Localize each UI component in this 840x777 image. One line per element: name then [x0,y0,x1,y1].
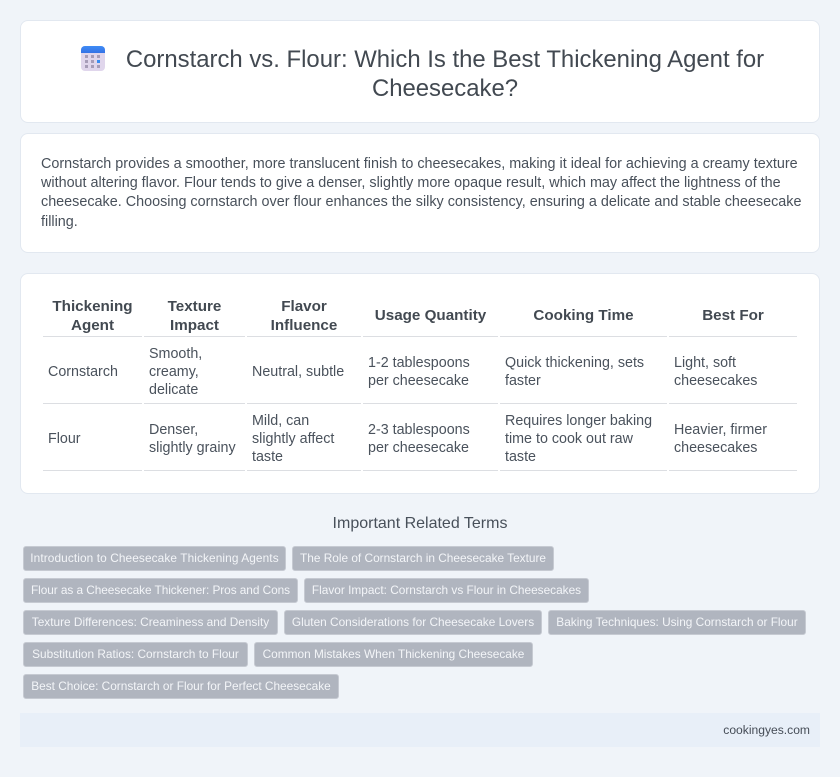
table header: Impact [170,317,219,334]
row: flour: slightly grainy [149,440,236,456]
intro text [41,156,801,230]
table header [52,298,764,334]
row: cornstarch [48,346,757,398]
related terms tags: Flour as a Cheesecake Thickener: Pros and Cons [31,583,290,597]
table header: Flavor [281,298,327,315]
row: cornstarch: Quick thickening, sets [505,355,644,371]
title [126,46,764,102]
related terms tags: Texture Differences: Creaminess and Density [32,615,269,629]
table header: Texture [168,298,221,315]
row: flour: Requires longer baking [505,413,652,429]
row: flour: Heavier, firmer [674,422,767,438]
row: flour: per cheesecake [368,440,469,456]
row: cornstarch: cheesecakes [674,373,757,389]
title: Cheesecake? [372,75,518,102]
intro text: Cornstarch provides a smoother, more translucent finish to cheesecakes, making it ideal for achieving a creamy texture [41,156,798,172]
row: cornstarch: Cornstarch [48,364,118,380]
intro panel [20,133,820,253]
table header: Usage Quantity [375,307,486,324]
footer bar [20,713,820,747]
row: flour [48,413,767,465]
related terms tags: Common Mistakes When Thickening Cheesecake [263,647,524,661]
row: flour: taste [505,449,536,465]
intro text: without altering flavor. Flour tends to give a denser, slightly more opaque result, which may affect the lightness of the [41,175,781,191]
row: flour: taste [252,449,283,465]
table panel [20,273,820,494]
related terms tags: Gluten Considerations for Cheesecake Lovers [292,615,534,629]
row: cornstarch: 1-2 tablespoons [368,355,470,371]
table header: Influence [271,317,337,334]
related terms tags: Flavor Impact: Cornstarch vs Flour in Cheesecakes [312,583,581,597]
row: flour: time to cook out raw [505,431,633,447]
related terms heading: Important Related Terms [333,515,507,532]
table header: Agent [71,317,114,334]
intro text: filling. [41,214,78,230]
related terms tags: Substitution Ratios: Cornstarch to Flour [32,647,239,661]
table header: Thickening [52,298,133,315]
related terms tags: Best Choice: Cornstarch or Flour for Perfect Cheesecake [31,679,331,693]
icon: calendar [81,46,105,71]
row: flour: Mild, can [252,413,309,429]
related terms tags [23,546,806,699]
comparison table [43,298,797,471]
row: flour: Flour [48,431,81,447]
header panel [20,20,820,123]
row: cornstarch: Light, soft [674,355,736,371]
row: cornstarch: Smooth, [149,346,202,362]
title: Cornstarch vs. Flour: Which Is the Best Thickening Agent for [126,46,764,73]
row: cornstarch: delicate [149,382,198,398]
row: flour: slightly affect [252,431,334,447]
row: flour: 2-3 tablespoons [368,422,470,438]
row: cornstarch: Neutral, subtle [252,364,344,380]
row: flour: cheesecakes [674,440,757,456]
row: flour: Denser, [149,422,198,438]
related terms tags: The Role of Cornstarch in Cheesecake Texture [300,551,546,565]
related terms tags: Introduction to Cheesecake Thickening Agents [30,551,279,565]
row: cornstarch: faster [505,373,541,389]
table header: Best For [702,307,764,324]
row: cornstarch: per cheesecake [368,373,469,389]
related terms tags: Baking Techniques: Using Cornstarch or Flour [556,615,798,629]
footer source text: cookingyes.com [723,723,810,737]
intro text: cheesecake. Choosing cornstarch over flour enhances the silky consistency, ensuring a delicate and stable cheesecake [41,194,801,210]
table header: Cooking Time [533,307,634,324]
row: cornstarch: creamy, [149,364,199,380]
